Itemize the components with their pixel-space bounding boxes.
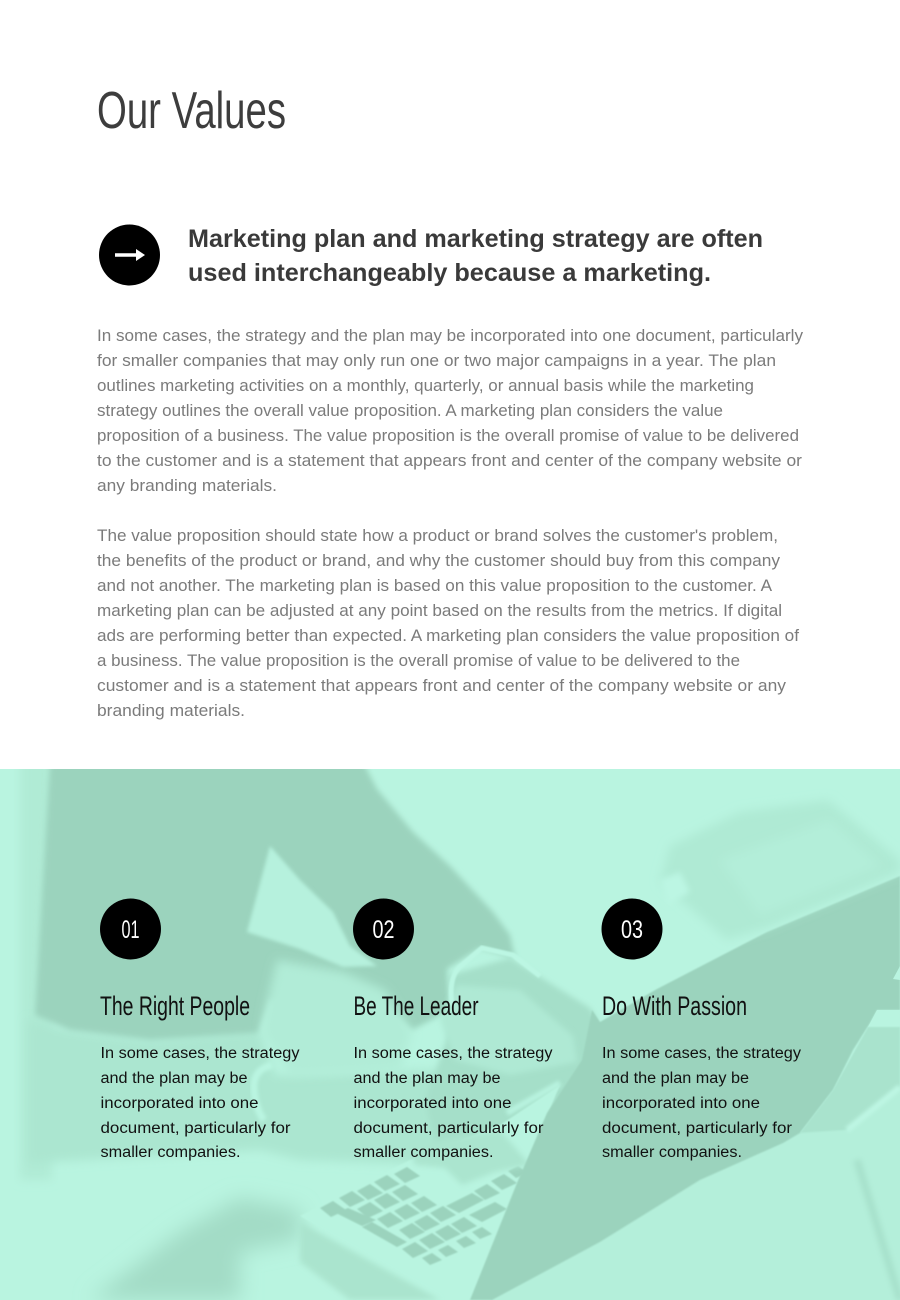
text block: second paragraph: branding materials. bbox=[97, 702, 245, 720]
text block: second paragraph: marketing plan can be adjusted at any point based on the results from the metrics. If digital bbox=[97, 602, 782, 620]
lower-right desk bbox=[490, 1087, 900, 1300]
value description: and the plan may be bbox=[602, 1070, 749, 1087]
text block: second paragraph: and not another. The marketing plan is based on this value proposition to the customer. A bbox=[97, 577, 772, 595]
value description: incorporated into one bbox=[602, 1095, 760, 1112]
wrist and hand bbox=[435, 959, 592, 1139]
text block: first paragraph: In some cases, the strategy and the plan may be incorporated into one document, particularly bbox=[97, 327, 804, 345]
value description bbox=[602, 1045, 801, 1161]
icon: arrow in circle bbox=[99, 224, 160, 286]
text block: first paragraph: to the customer and is a statement that appears front and center of the company website or bbox=[97, 452, 803, 470]
value description: incorporated into one bbox=[100, 1095, 258, 1112]
text block: second paragraph: The value proposition should state how a product or brand solves the customer's problem, bbox=[97, 527, 778, 545]
heading: used interchangeably because a marketing. bbox=[188, 259, 711, 287]
number badge 03 bbox=[602, 898, 662, 960]
text block: first paragraph: any branding materials. bbox=[97, 477, 277, 495]
text block: second paragraph: a business. The value proposition is the overall promise of value to be delivered to the bbox=[97, 652, 740, 670]
number badge 01: 01 bbox=[122, 916, 140, 944]
fingers bbox=[410, 1130, 530, 1185]
keyboard keys bbox=[320, 1166, 523, 1265]
value description: and the plan may be bbox=[100, 1070, 248, 1087]
text block: second paragraph: the benefits of the product or brand, and why the customer should buy from this company bbox=[97, 552, 781, 570]
forearm of left person bbox=[49, 1028, 434, 1163]
text block: first paragraph: proposition of a business. The value proposition is the overall promise of value to be delivered bbox=[97, 427, 799, 445]
value description: In some cases, the strategy bbox=[354, 1045, 553, 1062]
number badge 03: 03 bbox=[621, 916, 643, 944]
left cuff bbox=[254, 1065, 272, 1120]
panel: value 02 bbox=[353, 898, 553, 1161]
text block: first paragraph: outlines marketing activities on a monthly, quarterly, or annual basis while the marketing bbox=[97, 377, 754, 395]
lower shirt area bbox=[265, 959, 408, 1066]
value description: document, particularly for bbox=[354, 1120, 544, 1137]
text block: second paragraph: customer and is a statement that appears front and center of the company website or any bbox=[97, 677, 787, 695]
value title: Be The Leader bbox=[354, 991, 479, 1021]
text block: second paragraph: ads are performing better than expected. A marketing plan considers the value proposition of bbox=[97, 627, 799, 645]
number badge 02: 02 bbox=[372, 916, 394, 944]
value description: smaller companies. bbox=[354, 1144, 494, 1161]
laptop front shadow bbox=[300, 1227, 434, 1300]
value description: smaller companies. bbox=[602, 1144, 742, 1161]
title: Our Values bbox=[97, 82, 286, 140]
number badge 01 bbox=[100, 898, 161, 960]
panel: photo background bbox=[0, 740, 900, 1300]
laptop base bbox=[407, 1088, 558, 1164]
value description: document, particularly for bbox=[100, 1120, 290, 1137]
text block: second paragraph bbox=[97, 527, 799, 720]
laptop screen bbox=[470, 876, 900, 1300]
value description: incorporated into one bbox=[354, 1095, 512, 1112]
text block: first paragraph: for smaller companies that may only run one or two major campaigns in a year. The plan bbox=[97, 352, 776, 370]
value title: The Right People bbox=[100, 991, 250, 1021]
right-edge stripes bbox=[893, 966, 900, 980]
text block: first paragraph bbox=[97, 327, 804, 495]
panel: value 01 bbox=[100, 898, 300, 1161]
value title: Do With Passion bbox=[602, 991, 747, 1021]
suit jacket and sleeve bbox=[35, 760, 515, 1040]
value description: and the plan may be bbox=[354, 1070, 500, 1087]
number badge 02 bbox=[353, 898, 414, 960]
value description bbox=[100, 1045, 300, 1161]
heading: Marketing plan and marketing strategy are often bbox=[188, 225, 763, 253]
panel: value 03 bbox=[602, 898, 801, 1161]
phone at top right bbox=[660, 800, 900, 940]
value description bbox=[354, 1045, 553, 1161]
text block: first paragraph: strategy outlines the overall value proposition. A marketing plan considers the value bbox=[97, 402, 723, 420]
upper shirt area bbox=[247, 846, 377, 967]
value description: In some cases, the strategy bbox=[100, 1045, 300, 1062]
value description: In some cases, the strategy bbox=[602, 1045, 801, 1062]
value description: smaller companies. bbox=[100, 1144, 240, 1161]
lower-left shadow wedge bbox=[90, 1198, 300, 1300]
heading bbox=[188, 225, 763, 287]
value description: document, particularly for bbox=[602, 1120, 792, 1137]
